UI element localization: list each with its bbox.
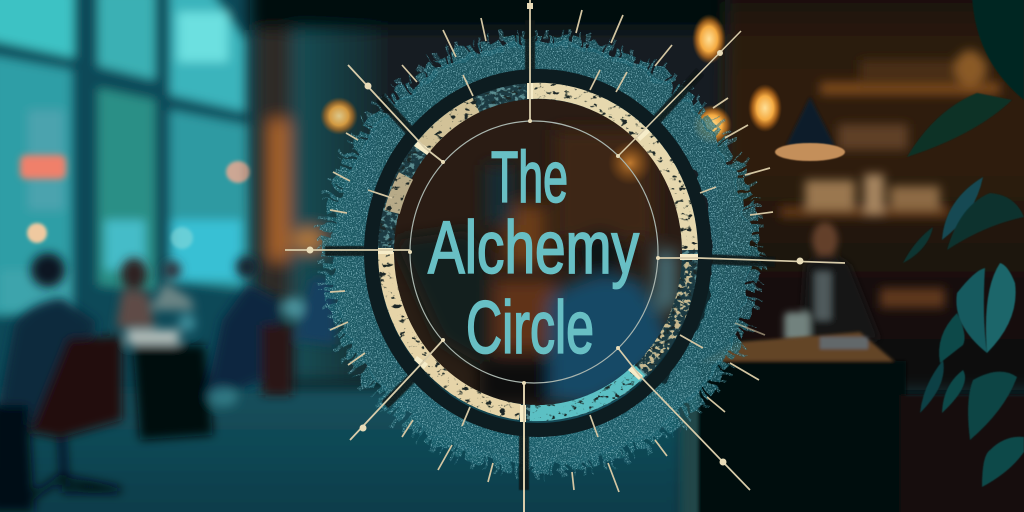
far person	[163, 261, 181, 279]
orange glow inside circle	[608, 141, 652, 185]
teal arc: bottom right	[530, 370, 640, 413]
title word: Circle: Circle	[466, 286, 594, 369]
panel: window wall	[0, 0, 270, 400]
spoke: north west	[348, 65, 443, 162]
woman	[121, 258, 147, 290]
cream arc: upper left	[424, 105, 476, 146]
neon sign	[20, 155, 66, 179]
spoke: west	[285, 249, 410, 251]
teal band underlay	[320, 33, 762, 475]
floor	[0, 390, 680, 512]
seated people and chairs	[0, 253, 335, 512]
spoke: east	[658, 258, 845, 263]
spoke gaps in band	[325, 20, 775, 490]
title word: Alchemy: Alchemy	[428, 206, 639, 289]
shelves and crockery	[780, 50, 1000, 308]
man in foreground	[0, 298, 97, 430]
cream speckle: lower right worn arc	[642, 262, 690, 369]
spoke: south west	[350, 340, 443, 440]
speckled teal sunburst band	[320, 33, 762, 475]
title	[428, 138, 639, 369]
spoke: south	[523, 383, 525, 512]
plant leaves	[903, 0, 1024, 487]
wear marks on ring	[386, 91, 690, 413]
cream arc: left	[392, 176, 406, 212]
outer tick marks	[330, 10, 773, 492]
table	[127, 330, 179, 344]
red chair	[30, 336, 122, 438]
cream arc: lower left	[386, 252, 520, 412]
dark wall and ceiling	[250, 0, 730, 380]
cream arc: top right	[530, 91, 690, 250]
inner thin circle	[410, 121, 658, 383]
title word: The: The	[491, 138, 568, 218]
worn teal texture on base ring	[386, 91, 690, 413]
window bokeh	[27, 161, 250, 249]
dark suited person	[236, 256, 258, 278]
dark ring	[371, 76, 705, 430]
warm right wall	[725, 0, 1024, 390]
person seated right	[784, 222, 880, 342]
spoke: north	[529, 0, 531, 121]
ring markers	[378, 83, 698, 422]
segmented ring	[386, 91, 690, 413]
counter	[678, 332, 1024, 512]
pendant lamps	[320, 14, 845, 161]
spoke: south east	[618, 348, 750, 490]
table base	[133, 345, 213, 440]
long spokes with markers	[285, 0, 845, 512]
circle interior tint	[386, 92, 686, 412]
spoke markers	[306, 3, 804, 466]
spoke: north east	[618, 31, 741, 156]
